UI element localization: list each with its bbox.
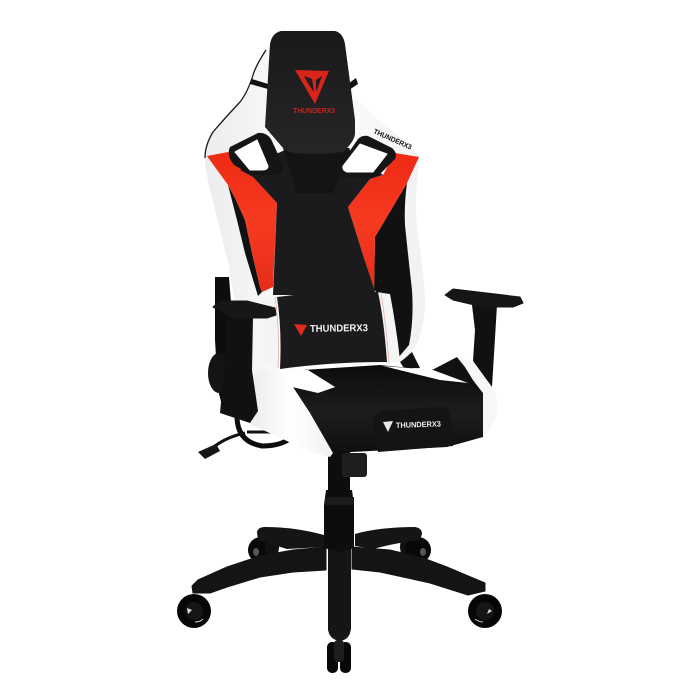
- rear left caster: [248, 536, 279, 563]
- front left base arm: [192, 547, 326, 593]
- left cut-out opening: [235, 140, 268, 170]
- left pillow flank: [263, 297, 279, 368]
- seat logo panel: [373, 407, 453, 452]
- seat left white patch: [278, 370, 335, 393]
- headrest cushion: [265, 31, 355, 154]
- rear right caster: [400, 536, 431, 563]
- mechanism dial: [208, 353, 230, 393]
- rear recline mechanism: [208, 277, 234, 413]
- tilt knob: [342, 453, 367, 477]
- centre front caster: [327, 640, 351, 673]
- front right base arm: [352, 547, 485, 595]
- headrest strap: [250, 78, 358, 92]
- right red panel: [348, 153, 419, 291]
- right front caster: [468, 594, 502, 628]
- pillow logo icon: [294, 324, 307, 336]
- headrest brand text: THUNDERX3: [293, 108, 335, 115]
- backrest side brand text: THUNDERX3: [372, 128, 413, 152]
- right cut-out opening: [343, 144, 387, 172]
- pillow brand text: THUNDERX3: [310, 323, 368, 335]
- right pillow flank: [376, 292, 400, 364]
- centre back panel: [240, 150, 383, 295]
- right armrest pad: [445, 289, 523, 307]
- height lever cable: [198, 418, 288, 459]
- right armrest: [445, 289, 523, 387]
- backrest white shell: [205, 50, 425, 372]
- seat right white patch: [383, 366, 468, 383]
- left red panel: [207, 152, 277, 292]
- right cut-out frame: [337, 136, 396, 178]
- left cut-out frame: [229, 133, 283, 175]
- left front caster: [177, 594, 211, 628]
- seat left bolster: [250, 370, 333, 457]
- pillow body: [277, 292, 387, 369]
- right side black wing: [374, 183, 413, 358]
- left armrest post: [220, 313, 258, 423]
- gas lift cylinder: [324, 450, 354, 552]
- right armrest post: [472, 305, 497, 387]
- left armrest: [213, 301, 276, 423]
- pillow seams: [275, 292, 389, 368]
- left side black wing: [228, 185, 262, 296]
- seat cushion: [293, 365, 483, 453]
- cable plug: [198, 444, 220, 459]
- rear left base arm: [257, 527, 324, 549]
- seat brand text: THUNDERX3: [396, 419, 442, 430]
- chair base: [177, 450, 502, 673]
- white outer bolster: [457, 357, 497, 439]
- left armrest pad: [213, 301, 276, 318]
- rear right base arm: [355, 527, 422, 549]
- lumbar pillow: [263, 292, 400, 369]
- upper back yoke: [283, 148, 350, 193]
- front centre base arm: [328, 548, 351, 641]
- right seat bolster: [432, 357, 497, 439]
- seat logo icon: [383, 421, 393, 432]
- backrest left edge shadow: [205, 50, 266, 158]
- right rear wedge: [400, 352, 420, 368]
- black inner bolster: [432, 357, 483, 400]
- headrest red logo: [293, 70, 335, 115]
